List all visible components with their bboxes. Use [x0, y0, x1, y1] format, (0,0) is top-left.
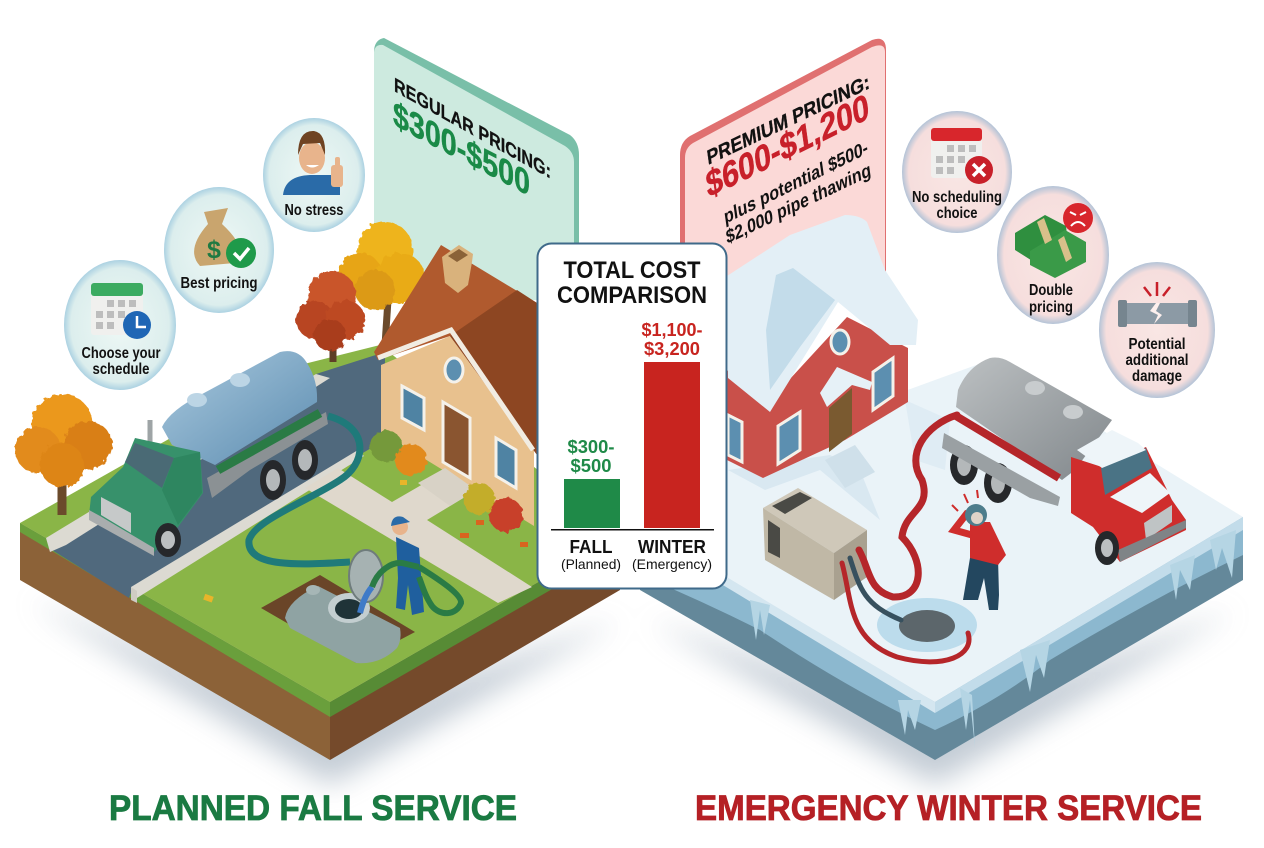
worker with hose: [372, 516, 461, 615]
house: fall: [374, 245, 537, 526]
label: pricing: [1029, 299, 1073, 316]
icon: money stacks and angry face: [1015, 203, 1093, 278]
wheels: [292, 440, 318, 480]
water stream: [360, 587, 372, 613]
cab snow: [1077, 430, 1146, 468]
chimney: [442, 245, 473, 293]
winter scene: icy platform: [640, 360, 1243, 760]
label: [1029, 282, 1073, 316]
front wheel: [155, 523, 181, 557]
window: [402, 386, 424, 430]
note: pipe thawing: $2,000 pipe thawing: [725, 159, 872, 249]
label: Choose your: [82, 345, 160, 362]
steps: [418, 468, 476, 506]
pain marks: [952, 490, 978, 511]
tank: [162, 351, 317, 465]
hose rack: [218, 413, 320, 470]
snow steps: [825, 445, 875, 488]
label: choice: [936, 205, 978, 222]
axis label: fall: [561, 537, 621, 572]
tree: yellow: [338, 222, 425, 345]
cab: [1071, 447, 1186, 562]
road: [52, 352, 385, 598]
drawback bubble: double pricing: [997, 186, 1109, 324]
grille: [1144, 505, 1172, 540]
drawback bubble: potential additional damage: [1099, 262, 1215, 398]
hose: teal from truck to tank: [249, 416, 360, 564]
icon: smiling man: [283, 131, 343, 195]
icon: calendar with clock: [91, 283, 151, 339]
chassis: [942, 433, 1060, 506]
axis label: fall: FALL: [570, 537, 612, 557]
note: pipe thawing: plus potential $500-: [723, 137, 869, 229]
tank domes: [187, 393, 207, 407]
round window: [831, 330, 849, 354]
axis label: winter: (Emergency): [632, 556, 712, 572]
panel: premium pricing sign: [680, 39, 886, 300]
porch roof: [820, 367, 872, 407]
label: Double: [1029, 282, 1073, 299]
walkway: [305, 468, 532, 603]
icon: calendar with x: [931, 128, 993, 184]
icon: cracked pipe: [1118, 282, 1197, 327]
snow shade: [728, 455, 880, 520]
platform shadows: [30, 600, 1235, 785]
round window: [445, 358, 463, 382]
tank lid: [349, 550, 383, 602]
grille: [101, 497, 131, 533]
label: regular pricing: REGULAR PRICING:: [394, 73, 551, 184]
axis label: winter: [632, 537, 712, 572]
benefit bubble: no stress: [263, 118, 365, 232]
bar value: fall: $500: [570, 456, 612, 476]
bar value: winter: [642, 320, 702, 359]
truck: red vacuum truck: [942, 358, 1186, 565]
roof: [374, 245, 537, 450]
drawback bubble: no scheduling choice: [902, 111, 1012, 233]
icon: money bag: $: [207, 236, 221, 264]
domes: [1025, 381, 1045, 395]
bumper: [89, 510, 154, 556]
snow roof: [727, 215, 918, 412]
hoses: red and dark: [842, 415, 969, 662]
person in winter jacket: [952, 490, 1006, 610]
tree: orange: [15, 394, 112, 515]
bar value: fall: $300-: [568, 437, 614, 457]
price: premium range: $600-$1,200: [704, 86, 872, 207]
bar value: fall: [568, 437, 614, 476]
bar value: winter: $1,100-: [642, 320, 702, 340]
windows: [873, 358, 893, 410]
label: schedule: [92, 361, 150, 378]
icicles: [750, 530, 1236, 748]
label: Potential: [1128, 336, 1186, 353]
benefit bubble: best pricing: Best pricing: [180, 275, 258, 292]
hose rack: [956, 416, 1059, 478]
fall scene: isometric ground platform: [20, 345, 620, 760]
generator: [763, 488, 867, 600]
heading: planned fall service: PLANNED FALL SERVICE: [109, 789, 517, 828]
label: [1126, 336, 1188, 385]
benefit bubble: best pricing: [164, 187, 274, 313]
heading: COMPARISON: [557, 282, 707, 309]
tree: red: [296, 271, 365, 362]
panel: regular pricing sign: [374, 38, 579, 300]
bushes: [370, 430, 523, 532]
label: No scheduling: [912, 189, 1002, 206]
bumper: [1118, 520, 1186, 562]
price: regular range: $300-$500: [393, 93, 530, 204]
ice puddle and manhole: [877, 598, 977, 652]
door: [443, 402, 470, 478]
axis label: winter: WINTER: [638, 537, 706, 557]
benefit bubble: no stress: No stress: [284, 202, 344, 219]
heading: [557, 257, 707, 309]
label: additional: [1126, 352, 1188, 369]
label: [912, 189, 1002, 222]
bar value: winter: $3,200: [644, 339, 700, 359]
right window: [496, 438, 516, 488]
front wheel: [1095, 531, 1119, 565]
panel: total cost comparison: [538, 244, 726, 588]
door: [829, 388, 852, 452]
cab: [89, 438, 203, 552]
truck: green vacuum truck: [89, 351, 328, 557]
label: [82, 345, 160, 378]
snow surface: [640, 360, 1243, 702]
septic tank and pit: [261, 550, 415, 663]
chassis: [207, 412, 328, 498]
tank: [956, 358, 1112, 480]
leaves: [203, 480, 528, 603]
bar chart: [551, 320, 714, 572]
exhaust: [148, 420, 152, 442]
heading: emergency winter service: EMERGENCY WINTER SERVICE: [695, 789, 1202, 828]
benefit bubble: choose your schedule: [64, 260, 176, 390]
label: premium pricing: PREMIUM PRICING:: [706, 71, 871, 170]
axis label: fall: (Planned): [561, 556, 621, 572]
house: winter: [727, 215, 918, 488]
label: damage: [1132, 368, 1182, 385]
heading: TOTAL COST: [564, 257, 701, 284]
